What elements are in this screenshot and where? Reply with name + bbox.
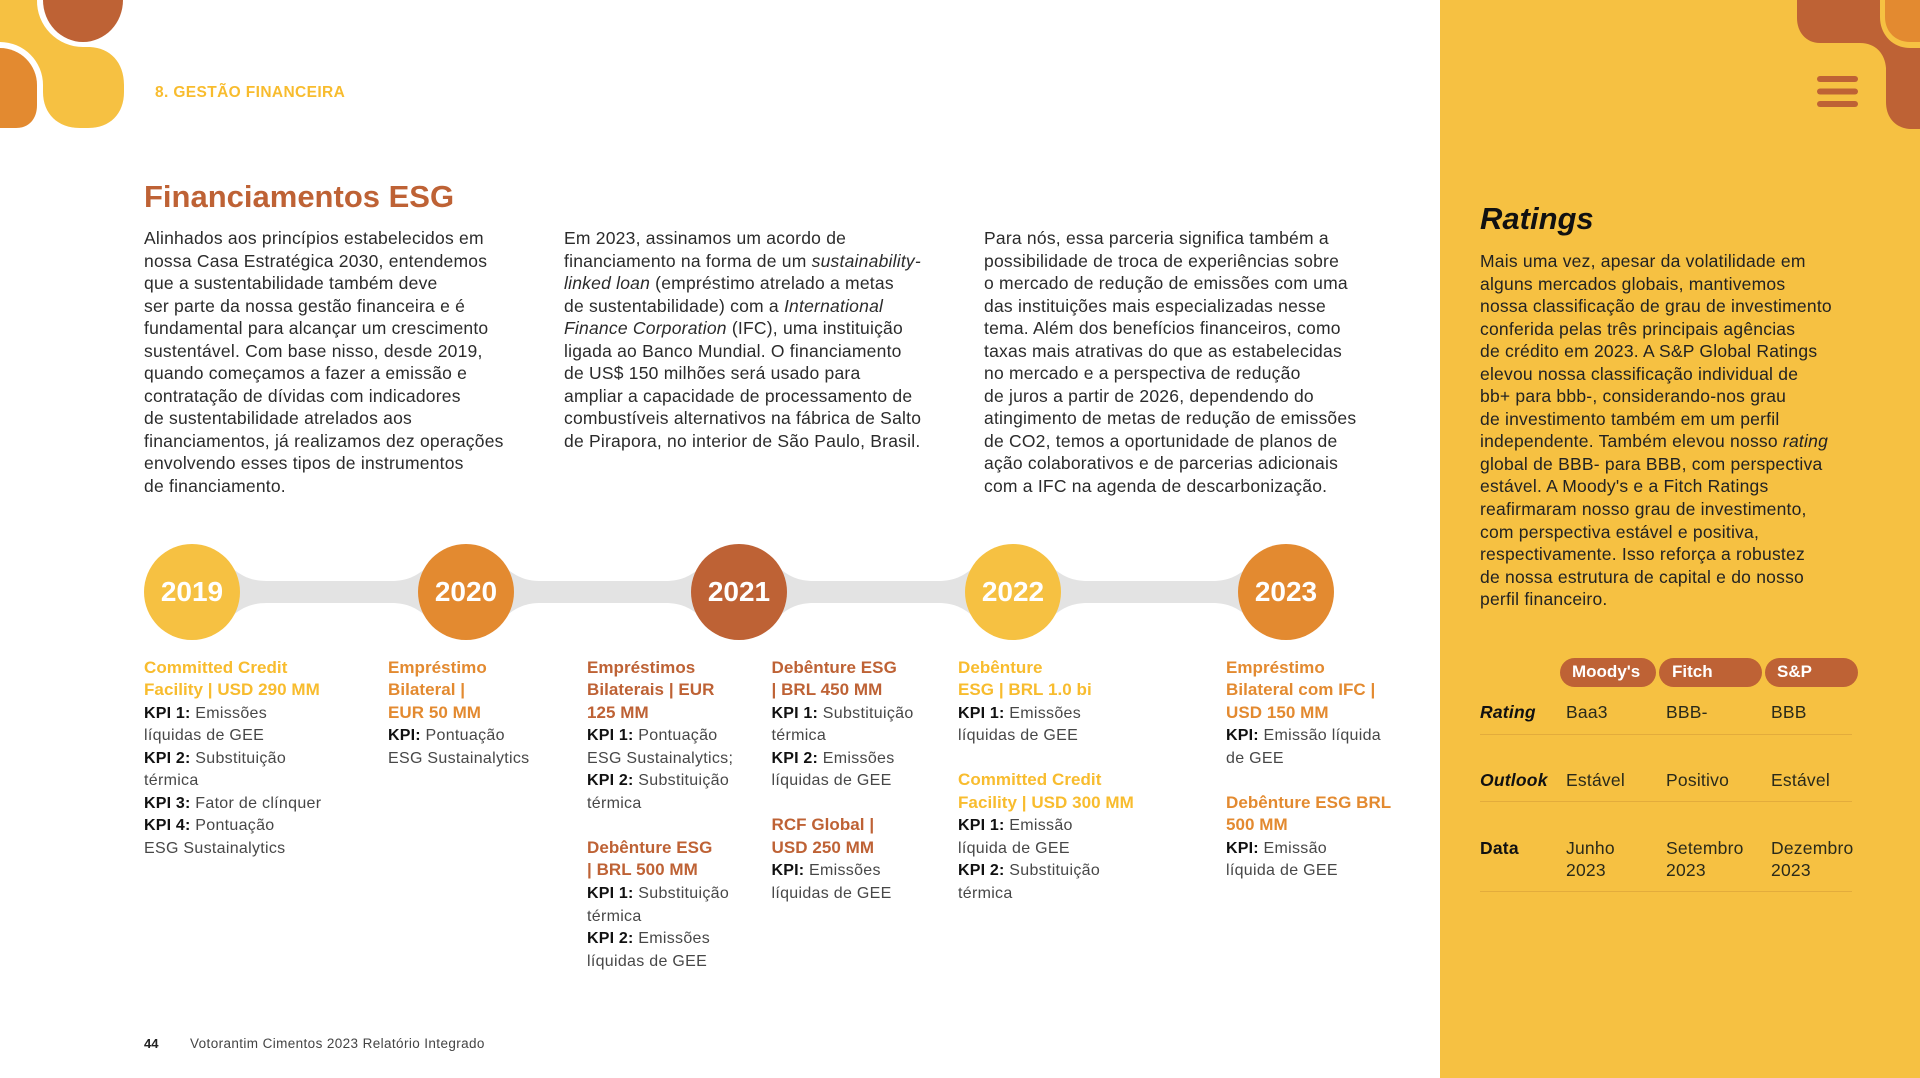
timeline text: 2023: KPI: Emissão líquida bbox=[1226, 727, 1381, 744]
text block: column 2: linked loan (empréstimo atrelado a metas bbox=[564, 273, 894, 293]
text block: column 1: de sustentabilidade atrelados aos bbox=[144, 408, 412, 428]
timeline text: 2023: Bilateral com IFC | bbox=[1226, 680, 1375, 699]
text block: column 3 bbox=[984, 228, 1356, 496]
row: Outlook: Estável bbox=[1771, 770, 1830, 790]
text block: column 1: que a sustentabilidade também deve bbox=[144, 273, 438, 293]
text block: column 1: de financiamento. bbox=[144, 476, 286, 496]
timeline node: 2023: 2023 bbox=[1255, 576, 1317, 607]
timeline text: 2022: líquidas de GEE bbox=[958, 727, 1078, 744]
text block: ratings description: elevou nossa classificação individual de bbox=[1480, 364, 1798, 384]
icon: top-right logo shapes bbox=[1797, 0, 1920, 129]
pill: Fitch bbox=[1659, 658, 1762, 687]
text block: column 1: fundamental para alcançar um crescimento bbox=[144, 318, 488, 338]
chart: timeline connector bbox=[234, 570, 1243, 614]
row: Data bbox=[1480, 838, 1853, 880]
timeline text: 2021 first column: líquidas de GEE bbox=[587, 953, 707, 970]
timeline text: 2021 first column bbox=[587, 658, 733, 970]
timeline text: 2019: ESG Sustainalytics bbox=[144, 840, 285, 857]
timeline node: 2021: 2021 bbox=[708, 576, 770, 607]
text block: ratings description: global de BBB- para BBB, com perspectiva bbox=[1480, 454, 1822, 474]
timeline text: 2022: KPI 1: Emissão bbox=[958, 817, 1073, 834]
timeline text: 2020: Empréstimo bbox=[388, 658, 487, 676]
row: Rating: BBB- bbox=[1666, 702, 1708, 722]
row: Rating: Rating bbox=[1480, 702, 1536, 722]
timeline text: 2021 first column: KPI 2: Substituição bbox=[587, 772, 729, 789]
text block: ratings description: com perspectiva estável e positiva, bbox=[1480, 522, 1759, 542]
timeline text: 2021 second column: KPI: Emissões bbox=[772, 862, 881, 879]
timeline text: 2019: KPI 2: Substituição bbox=[144, 750, 286, 767]
timeline text: 2021 first column: KPI 2: Emissões bbox=[587, 930, 710, 947]
timeline node: 2023 bbox=[1238, 544, 1334, 640]
row: Data: 2023 bbox=[1566, 860, 1606, 880]
timeline text: 2022: térmica bbox=[958, 885, 1013, 902]
timeline text: 2020 bbox=[388, 658, 529, 767]
text block: column 2: financiamento na forma de um sustainability- bbox=[564, 251, 921, 271]
timeline text: 2021 second column bbox=[772, 658, 914, 902]
text block: column 3: tema. Além dos benefícios financeiros, como bbox=[984, 318, 1341, 338]
text block: ratings description: reafirmaram nosso grau de investimento, bbox=[1480, 499, 1807, 519]
timeline text: 2021 second column: líquidas de GEE bbox=[772, 885, 892, 902]
text block: column 1: sustentável. Com base nisso, desde 2019, bbox=[144, 341, 483, 361]
timeline text: 2019: térmica bbox=[144, 772, 199, 789]
timeline text: 2022: Facility | USD 300 MM bbox=[958, 793, 1134, 812]
text block: ratings description: Mais uma vez, apesar da volatilidade em bbox=[1480, 251, 1806, 271]
text block: column 3: das instituições mais especializadas nesse bbox=[984, 296, 1326, 316]
heading: Ratings: Ratings bbox=[1480, 201, 1594, 236]
text block: column 2: Finance Corporation (IFC), uma instituição bbox=[564, 318, 903, 338]
row: Outlook: Positivo bbox=[1666, 770, 1729, 790]
section label: 8. GESTÃO FINANCEIRA bbox=[155, 84, 345, 101]
text block: column 3: de juros a partir de 2026, dependendo do bbox=[984, 386, 1314, 406]
timeline text: 2021 second column: | BRL 450 MM bbox=[772, 680, 882, 699]
text block: column 2: ligada ao Banco Mundial. O financiamento bbox=[564, 341, 902, 361]
row: Outlook: Estável bbox=[1566, 770, 1625, 790]
timeline node: 2019: 2019 bbox=[161, 576, 223, 607]
row: Data: Setembro bbox=[1666, 838, 1744, 858]
text block: ratings description bbox=[1480, 251, 1832, 609]
text block: ratings description: independente. Também elevou nosso rating bbox=[1480, 431, 1828, 451]
text block: ratings description: de investimento também em um perfil bbox=[1480, 409, 1779, 429]
text block: column 3: atingimento de metas de redução de emissões bbox=[984, 408, 1356, 428]
timeline text: 2022: ESG | BRL 1.0 bi bbox=[958, 680, 1092, 699]
text block: column 3: taxas mais atrativas do que as estabelecidas bbox=[984, 341, 1342, 361]
text block: column 3: possibilidade de troca de experiências sobre bbox=[984, 251, 1339, 271]
timeline text: 2019: KPI 3: Fator de clínquer bbox=[144, 795, 321, 812]
text block: column 2: Em 2023, assinamos um acordo de bbox=[564, 228, 846, 248]
text block: column 1: envolvendo esses tipos de instrumentos bbox=[144, 453, 464, 473]
timeline text: 2021 first column: Empréstimos bbox=[587, 658, 695, 676]
timeline node: 2020: 2020 bbox=[435, 576, 497, 607]
icon: hamburger menu bbox=[1817, 76, 1858, 107]
text block: column 2: de Pirapora, no interior de São Paulo, Brasil. bbox=[564, 431, 920, 451]
timeline text: 2023: KPI: Emissão bbox=[1226, 840, 1327, 857]
timeline node: 2019 bbox=[144, 544, 240, 640]
timeline text: 2019: líquidas de GEE bbox=[144, 727, 264, 744]
timeline text: 2019 bbox=[144, 658, 321, 857]
text block: column 2: combustíveis alternativos na fábrica de Salto bbox=[564, 408, 921, 428]
text block: column 2: ampliar a capacidade de processamento de bbox=[564, 386, 912, 406]
text block: column 3: de CO2, temos a oportunidade de planos de bbox=[984, 431, 1337, 451]
text block: column 3: com a IFC na agenda de descarbonização. bbox=[984, 476, 1327, 496]
timeline text: 2020: EUR 50 MM bbox=[388, 703, 481, 722]
timeline text: 2022: KPI 1: Emissões bbox=[958, 705, 1081, 722]
text block: column 1: ser parte da nossa gestão financeira e é bbox=[144, 296, 465, 316]
text block: ratings description: perfil financeiro. bbox=[1480, 589, 1608, 609]
row: Rating: Baa3 bbox=[1566, 702, 1608, 722]
text block: column 3: no mercado e a perspectiva de redução bbox=[984, 363, 1301, 383]
text block: column 3: Para nós, essa parceria significa também a bbox=[984, 228, 1329, 248]
timeline node: 2020 bbox=[418, 544, 514, 640]
text block: ratings description: estável. A Moody's e a Fitch Ratings bbox=[1480, 476, 1768, 496]
timeline text: 2023: líquida de GEE bbox=[1226, 862, 1338, 879]
row: Rating: BBB bbox=[1771, 702, 1807, 722]
timeline text: 2023: de GEE bbox=[1226, 750, 1284, 767]
footer: report name: Votorantim Cimentos 2023 Relatório Integrado bbox=[190, 1036, 485, 1051]
text block: column 1 bbox=[144, 228, 504, 496]
timeline node: 2022: 2022 bbox=[982, 576, 1044, 607]
timeline text: 2021 first column: térmica bbox=[587, 908, 642, 925]
text block: column 1: Alinhados aos princípios estabelecidos em bbox=[144, 228, 484, 248]
timeline text: 2020: KPI: Pontuação bbox=[388, 727, 505, 744]
timeline text: 2021 second column: térmica bbox=[772, 727, 826, 744]
timeline text: 2021 second column: KPI 2: Emissões bbox=[772, 750, 895, 767]
timeline text: 2020: Bilateral | bbox=[388, 680, 465, 699]
timeline text: 2023: 500 MM bbox=[1226, 815, 1288, 834]
row: Outlook: Outlook bbox=[1480, 770, 1548, 790]
text block: column 2: de sustentabilidade) com a International bbox=[564, 296, 883, 316]
text block: ratings description: alguns mercados globais, mantivemos bbox=[1480, 274, 1785, 294]
row: Data: Dezembro bbox=[1771, 838, 1853, 858]
timeline text: 2021 second column: KPI 1: Substituição bbox=[772, 705, 914, 722]
pill: Moody's: Moody's bbox=[1572, 662, 1640, 681]
timeline text: 2022: KPI 2: Substituição bbox=[958, 862, 1100, 879]
row: Outlook bbox=[1480, 770, 1830, 790]
panel: ratings background bbox=[1440, 0, 1920, 1078]
row: Data: Junho bbox=[1566, 838, 1615, 858]
text block: column 1: financiamentos, já realizamos dez operações bbox=[144, 431, 504, 451]
text block: ratings description: conferida pelas três principais agências bbox=[1480, 319, 1795, 339]
text block: ratings description: respectivamente. Isso reforça a robustez bbox=[1480, 544, 1805, 564]
footer: page number: 44 bbox=[144, 1036, 158, 1051]
pill: S&P bbox=[1765, 658, 1858, 687]
row: Data: 2023 bbox=[1771, 860, 1811, 880]
row: Rating bbox=[1480, 702, 1807, 722]
text block: column 2: de US$ 150 milhões será usado para bbox=[564, 363, 860, 383]
text block: column 3: ação colaborativos e de parcerias adicionais bbox=[984, 453, 1338, 473]
timeline text: 2023: Debênture ESG BRL bbox=[1226, 793, 1391, 812]
timeline text: 2019: KPI 4: Pontuação bbox=[144, 817, 274, 834]
timeline text: 2021 first column: KPI 1: Substituição bbox=[587, 885, 729, 902]
timeline text: 2021 first column: ESG Sustainalytics; bbox=[587, 750, 733, 767]
heading: Financiamentos ESG: Financiamentos ESG bbox=[144, 179, 454, 214]
timeline text: 2020: ESG Sustainalytics bbox=[388, 750, 529, 767]
row: Data: 2023 bbox=[1666, 860, 1706, 880]
pill: Moody's bbox=[1560, 658, 1656, 687]
text block: column 1: nossa Casa Estratégica 2030, entendemos bbox=[144, 251, 487, 271]
timeline text: 2021 first column: KPI 1: Pontuação bbox=[587, 727, 718, 744]
timeline text: 2019: Facility | USD 290 MM bbox=[144, 680, 320, 699]
timeline text: 2019: Committed Credit bbox=[144, 658, 287, 676]
timeline text: 2023 bbox=[1226, 658, 1391, 879]
text block: column 3: o mercado de redução de emissões com uma bbox=[984, 273, 1348, 293]
timeline text: 2021 second column: RCF Global | bbox=[772, 815, 874, 834]
timeline text: 2023: Empréstimo bbox=[1226, 658, 1325, 676]
timeline text: 2021 first column: 125 MM bbox=[587, 703, 649, 722]
timeline text: 2021 first column: térmica bbox=[587, 795, 642, 812]
pill: S&P: S&P bbox=[1777, 662, 1812, 681]
timeline text: 2021 second column: USD 250 MM bbox=[772, 838, 874, 857]
timeline text: 2019: KPI 1: Emissões bbox=[144, 705, 267, 722]
timeline text: 2022 bbox=[958, 658, 1134, 902]
pill: Fitch: Fitch bbox=[1672, 662, 1713, 681]
timeline text: 2021 second column: líquidas de GEE bbox=[772, 772, 892, 789]
icon: top-left logo shapes bbox=[0, 0, 124, 128]
timeline node: 2022 bbox=[965, 544, 1061, 640]
timeline text: 2021 second column: Debênture ESG bbox=[772, 658, 897, 676]
timeline text: 2023: USD 150 MM bbox=[1226, 703, 1329, 722]
timeline text: 2021 first column: | BRL 500 MM bbox=[587, 860, 698, 879]
timeline text: 2022: líquida de GEE bbox=[958, 840, 1070, 857]
timeline text: 2021 first column: Bilaterais | EUR bbox=[587, 680, 714, 699]
text block: ratings description: de nossa estrutura de capital e do nosso bbox=[1480, 567, 1804, 587]
timeline text: 2021 first column: Debênture ESG bbox=[587, 838, 712, 857]
text block: ratings description: bb+ para bbb-, considerando-nos grau bbox=[1480, 386, 1786, 406]
text block: column 1: quando começamos a fazer a emissão e bbox=[144, 363, 467, 383]
text block: column 2 bbox=[564, 228, 921, 451]
text block: ratings description: nossa classificação de grau de investimento bbox=[1480, 296, 1832, 316]
timeline node: 2021 bbox=[691, 544, 787, 640]
timeline text: 2022: Debênture bbox=[958, 658, 1043, 676]
text block: ratings description: de crédito em 2023. A S&P Global Ratings bbox=[1480, 341, 1817, 361]
row: Data: Data bbox=[1480, 838, 1519, 858]
timeline text: 2022: Committed Credit bbox=[958, 770, 1101, 789]
text block: column 1: contratação de dívidas com indicadores bbox=[144, 386, 461, 406]
